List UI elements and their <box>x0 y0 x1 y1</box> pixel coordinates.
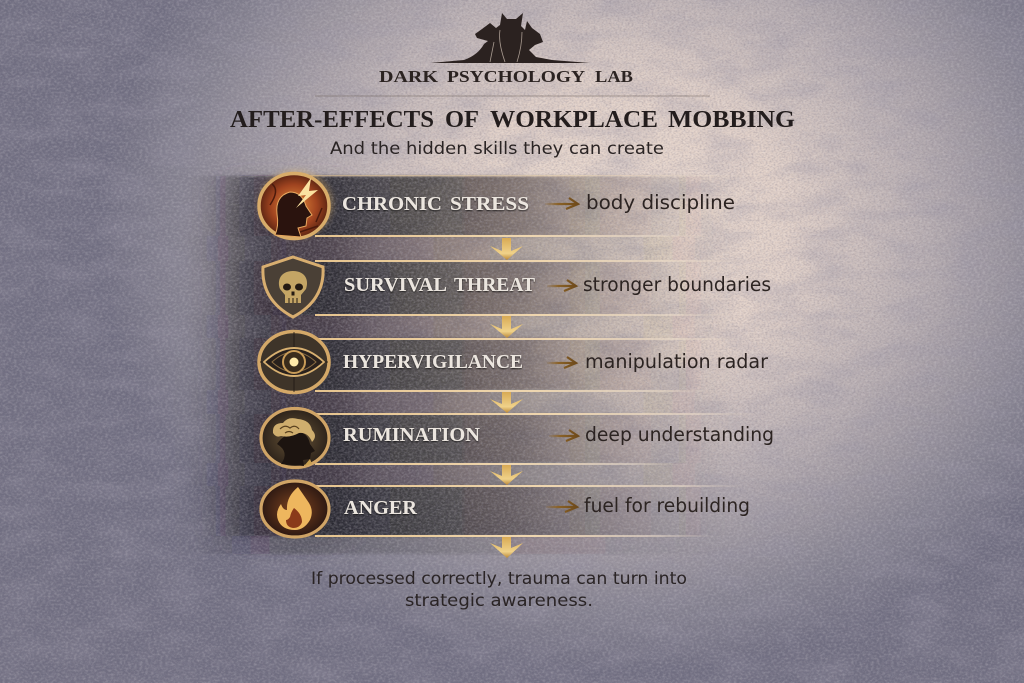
label: STRESS <box>450 193 529 215</box>
arrow <box>549 430 578 441</box>
row 2: survival threat <box>263 257 771 317</box>
subtitle: And the hidden skills they can create <box>330 139 664 159</box>
closing note: If processed correctly, trauma can turn into <box>311 569 687 588</box>
skill: manipulation radar <box>585 350 769 373</box>
title: WORKPLACE <box>490 107 658 133</box>
label: HYPERVIGILANCE <box>343 351 523 373</box>
arrow <box>547 357 576 368</box>
title <box>230 107 795 133</box>
label <box>342 193 529 215</box>
title: AFTER-EFFECTS <box>230 107 434 133</box>
label: RUMINATION <box>343 424 480 446</box>
arrow <box>547 280 576 291</box>
closing note <box>311 569 687 610</box>
down arrow 1 <box>490 238 523 260</box>
label <box>344 274 535 296</box>
down arrow 2 <box>490 316 523 338</box>
closing note: strategic awareness. <box>405 591 593 610</box>
arrow <box>545 198 578 209</box>
arrow <box>546 501 577 512</box>
brand name <box>379 67 633 86</box>
title: MOBBING <box>668 107 795 133</box>
label: ANGER <box>344 497 417 519</box>
logo: three-headed wolf silhouette <box>430 13 590 63</box>
brand name: DARK <box>379 67 439 86</box>
skill: fuel for rebuilding <box>584 494 750 517</box>
row 1: chronic stress <box>259 170 735 238</box>
icon: eye <box>259 332 329 392</box>
icon: head with brain <box>261 408 329 468</box>
title: OF <box>445 107 479 133</box>
down arrow 4 <box>490 465 523 485</box>
icon: head with lightning bolt <box>259 170 333 238</box>
label: SURVIVAL <box>344 274 447 296</box>
down arrow 5 <box>490 537 523 558</box>
icon: shield with skull <box>263 257 323 317</box>
flow bands panel <box>185 176 735 554</box>
row 5: anger <box>261 481 750 537</box>
brand name: LAB <box>595 67 633 86</box>
label: THREAT <box>454 274 535 296</box>
brand name: PSYCHOLOGY <box>447 67 585 86</box>
separator lines <box>300 175 770 537</box>
label: CHRONIC <box>342 193 442 215</box>
row 3: hypervigilance <box>259 332 769 392</box>
down arrow 3 <box>490 392 523 413</box>
skill: stronger boundaries <box>583 273 771 296</box>
skill: body discipline <box>586 191 735 214</box>
icon: flame <box>261 481 329 537</box>
row 4: rumination <box>261 408 774 468</box>
skill: deep understanding <box>585 423 774 446</box>
